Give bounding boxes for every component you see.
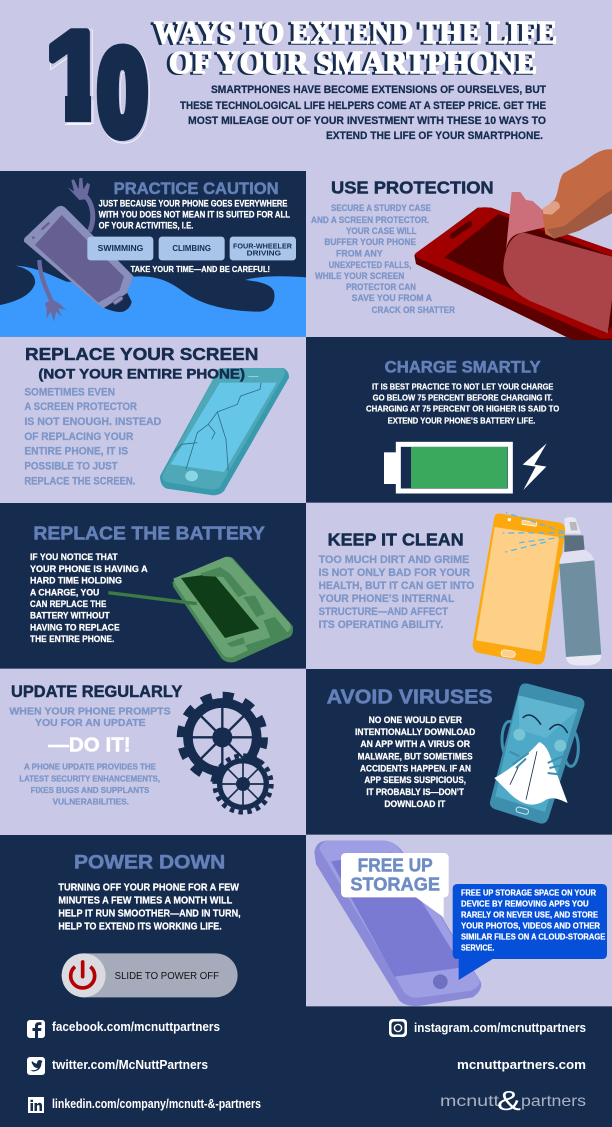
- body text: IT PROBABLY IS—DON’T: [366, 787, 464, 797]
- title: WAYS TO EXTEND THE LIFE: [151, 15, 554, 51]
- body text: HEALTH, BUT IT CAN GET INTO: [319, 580, 475, 592]
- body text: FROM ANY: [336, 248, 383, 258]
- do it callout: —DO IT!: [48, 735, 131, 757]
- body text: BUFFER YOUR PHONE: [324, 237, 416, 247]
- icon: large gear: [181, 696, 264, 779]
- body text: YOUR PHONE IS HAVING A: [30, 564, 148, 574]
- intro text: SMARTPHONES HAVE BECOME EXTENSIONS OF OURSELVES, BUT: [211, 84, 546, 96]
- body text: APP SEEMS SUSPICIOUS,: [364, 775, 466, 785]
- body text: IT IS BEST PRACTICE TO NOT LET YOUR CHARGE: [372, 381, 554, 391]
- body text: CRACK OR SHATTER: [372, 305, 455, 315]
- body text: ITS OPERATING ABILITY.: [319, 619, 443, 631]
- icon: drowning phone: [24, 178, 133, 322]
- body text: [19, 762, 160, 806]
- speech bubble: title: [341, 853, 449, 917]
- body text: YOUR PHONE’S INTERNAL: [319, 593, 455, 605]
- body text: DOWNLOAD IT: [384, 799, 446, 809]
- heading: [25, 344, 258, 381]
- facebook link: facebook.com/mcnuttpartners: [52, 1020, 220, 1034]
- slide to power off control: [62, 953, 238, 997]
- body text: EXTEND YOUR PHONE’S BATTERY LIFE.: [388, 415, 535, 425]
- body text: GO BELOW 75 PERCENT BEFORE CHARGING IT.: [373, 392, 553, 402]
- heading: AVOID VIRUSES: [327, 687, 493, 709]
- footer: [27, 1019, 586, 1116]
- body text: HELP IT RUN SMOOTHER—AND IN TURN,: [58, 909, 241, 920]
- intro text: [180, 84, 546, 142]
- icon: sneezing phone: [490, 683, 584, 824]
- body text: A PHONE UPDATE PROVIDES THE: [24, 762, 156, 772]
- icon: battery: [384, 444, 510, 491]
- body text: THE ENTIRE PHONE.: [30, 634, 114, 644]
- prompt text: WHEN YOUR PHONE PROMPTS: [9, 707, 171, 718]
- icon: twitter: [27, 1057, 45, 1075]
- body text: A CHARGE, YOU: [30, 588, 99, 598]
- body text: IF YOU NOTICE THAT: [30, 552, 118, 562]
- body text: YOUR CASE WILL: [346, 226, 417, 236]
- panel: keep it clean: [306, 503, 612, 669]
- big number 10: 0: [100, 29, 148, 161]
- body text: SOMETIMES EVEN: [24, 386, 115, 398]
- body text: MINUTES A FEW TIMES A MONTH WILL: [58, 896, 232, 907]
- icon: instagram: [389, 1019, 407, 1037]
- body text: CAN REPLACE THE: [30, 599, 106, 609]
- icon: cracked phone: [160, 368, 289, 495]
- speech bubble: body: SERVICE.: [461, 943, 494, 953]
- panel: practice caution: [0, 171, 306, 337]
- body text: OF REPLACING YOUR: [24, 431, 134, 443]
- speech bubble: body: YOUR PHOTOS, VIDEOS AND OTHER: [461, 921, 600, 931]
- icon: red phone with screen protector: [414, 149, 612, 340]
- logo: [440, 1085, 586, 1116]
- body text: ENTIRE PHONE, IT IS: [24, 446, 128, 458]
- body text: AN APP WITH A VIRUS OR: [360, 739, 470, 749]
- activity buttons: [87, 237, 296, 260]
- big number 10: 1: [47, 9, 109, 147]
- body text: [24, 386, 162, 488]
- icon: linkedin: [28, 1097, 44, 1113]
- logo: mcnutt: [440, 1093, 500, 1110]
- heading: USE PROTECTION: [331, 177, 494, 197]
- title: WAYS TO EXTEND THE LIFE: [154, 14, 557, 50]
- heading: PRACTICE CAUTION: [114, 179, 279, 198]
- body text: WHILE YOUR SCREEN: [315, 271, 404, 281]
- body text: WITH YOU DOES NOT MEAN IT IS SUITED FOR ALL: [99, 209, 290, 219]
- body text: TURNING OFF YOUR PHONE FOR A FEW: [58, 883, 240, 894]
- prompt text: YOU FOR AN UPDATE: [35, 718, 146, 729]
- icon: facebook: [27, 1020, 45, 1038]
- linkedin link: linkedin.com/company/mcnutt-&-partners: [52, 1097, 261, 1111]
- body text: ACCIDENTS HAPPEN. IF AN: [360, 763, 471, 773]
- speech bubble: title: STORAGE: [350, 874, 440, 895]
- heading: REPLACE YOUR SCREEN: [25, 344, 258, 364]
- body text: A SCREEN PROTECTOR: [24, 401, 137, 413]
- panel: avoid viruses: [306, 669, 612, 835]
- activity buttons: CLIMBING: [172, 243, 211, 253]
- body text: [311, 203, 455, 315]
- prompt text: [9, 707, 171, 729]
- body text: TOO MUCH DIRT AND GRIME: [319, 554, 469, 566]
- body text: IS NOT ENOUGH. INSTEAD: [24, 416, 162, 428]
- body text: JUST BECAUSE YOUR PHONE GOES EVERYWHERE: [99, 198, 287, 208]
- body text: AND A SCREEN PROTECTOR.: [311, 215, 429, 225]
- big number 10: 0: [100, 29, 148, 161]
- body text: IS NOT ONLY BAD FOR YOUR: [319, 567, 470, 579]
- panel: free up storage: [306, 835, 612, 1006]
- website link: mcnuttpartners.com: [457, 1058, 586, 1072]
- body text: INTENTIONALLY DOWNLOAD: [355, 727, 476, 737]
- big number 10: 0: [98, 27, 146, 159]
- panel: power down: [0, 835, 306, 1009]
- speech bubble: body: FREE UP STORAGE SPACE ON YOUR: [461, 888, 596, 898]
- panel: charge smartly: [306, 337, 612, 503]
- body text: [355, 715, 476, 809]
- icon: phone circuit board: [108, 557, 293, 662]
- body text: MALWARE, BUT SOMETIMES: [358, 751, 473, 761]
- body text: [319, 554, 475, 631]
- icon: lightning bolt: [523, 443, 547, 490]
- body text: REPLACE THE SCREEN.: [24, 476, 135, 488]
- activity buttons: SWIMMING: [98, 243, 144, 253]
- twitter link: twitter.com/McNuttPartners: [52, 1058, 208, 1072]
- body text: [99, 198, 290, 231]
- activity buttons: DRIVING: [247, 248, 281, 257]
- body text: HAVING TO REPLACE: [30, 623, 120, 633]
- body text: PROTECTOR CAN: [346, 282, 416, 292]
- heading: KEEP IT CLEAN: [328, 529, 464, 549]
- instagram link: instagram.com/mcnuttpartners: [414, 1021, 586, 1035]
- title: OF YOUR SMARTPHONE: [169, 44, 537, 80]
- body text: HELP TO EXTEND ITS WORKING LIFE.: [58, 922, 222, 933]
- header: [38, 7, 557, 161]
- body text: OF YOUR ACTIVITIES, I.E.: [99, 221, 193, 231]
- panel: replace your screen: [0, 337, 306, 503]
- big number 10: 1: [47, 9, 109, 147]
- title: [151, 14, 557, 81]
- panel: use protection: [306, 149, 612, 340]
- closing text: TAKE YOUR TIME—AND BE CAREFUL!: [131, 264, 270, 274]
- panel: update regularly: [0, 669, 306, 835]
- speech bubble: body: DEVICE BY REMOVING APPS YOU: [461, 899, 589, 909]
- intro text: MOST MILEAGE OUT OF YOUR INVESTMENT WITH THESE 10 WAYS TO: [188, 115, 546, 127]
- logo: &: [497, 1085, 521, 1116]
- slide to power off control: SLIDE TO POWER OFF: [115, 971, 219, 982]
- footer background: [0, 1006, 612, 1127]
- activity buttons: FOUR-WHEELER: [233, 241, 292, 250]
- intro text: THESE TECHNOLOGICAL LIFE HELPERS COME AT A STEEP PRICE. GET THE: [180, 100, 546, 112]
- body text: [58, 883, 241, 933]
- body text: VULNERABILITIES.: [53, 796, 129, 806]
- body text: [30, 552, 148, 644]
- body text: CHARGING AT 75 PERCENT OR HIGHER IS SAID TO: [366, 403, 560, 413]
- body text: [366, 381, 560, 425]
- logo: partners: [521, 1093, 586, 1110]
- big number 10: [38, 7, 148, 161]
- body text: POSSIBLE TO JUST: [24, 461, 118, 473]
- body text: NO ONE WOULD EVER: [369, 715, 462, 725]
- speech bubble: title: FREE UP: [358, 854, 433, 875]
- icon: orange phone: [473, 513, 565, 664]
- heading: REPLACE THE BATTERY: [33, 522, 266, 543]
- icon: purple phone: [314, 841, 481, 1006]
- heading: (NOT YOUR ENTIRE PHONE): [38, 365, 245, 381]
- body text: SAVE YOU FROM A: [352, 293, 432, 303]
- body text: FIXES BUGS AND SUPPLANTS: [31, 785, 150, 795]
- speech bubble: body: RARELY OR NEVER USE, AND STORE: [461, 910, 598, 920]
- body text: BATTERY WITHOUT: [30, 611, 110, 621]
- body text: SECURE A STURDY CASE: [331, 203, 431, 213]
- body text: UNEXPECTED FALLS,: [329, 260, 411, 270]
- body text: STRUCTURE—AND AFFECT: [319, 606, 448, 618]
- heading: CHARGE SMARTLY: [385, 358, 541, 377]
- wave: [0, 266, 306, 337]
- body text: LATEST SECURITY ENHANCEMENTS,: [19, 773, 160, 783]
- icon: small gear: [215, 756, 271, 812]
- body text: HARD TIME HOLDING: [30, 576, 122, 586]
- spray dashes: [503, 513, 564, 552]
- icon: spray bottle: [559, 517, 601, 665]
- speech bubble: body: [453, 884, 607, 980]
- icon: power symbol: [71, 962, 95, 988]
- panel: replace the battery: [0, 503, 306, 669]
- big number 10: 1: [45, 7, 107, 145]
- intro text: EXTEND THE LIFE OF YOUR SMARTPHONE.: [326, 130, 543, 142]
- title: OF YOUR SMARTPHONE: [166, 45, 534, 81]
- heading: POWER DOWN: [74, 852, 225, 873]
- heading: UPDATE REGULARLY: [11, 682, 182, 701]
